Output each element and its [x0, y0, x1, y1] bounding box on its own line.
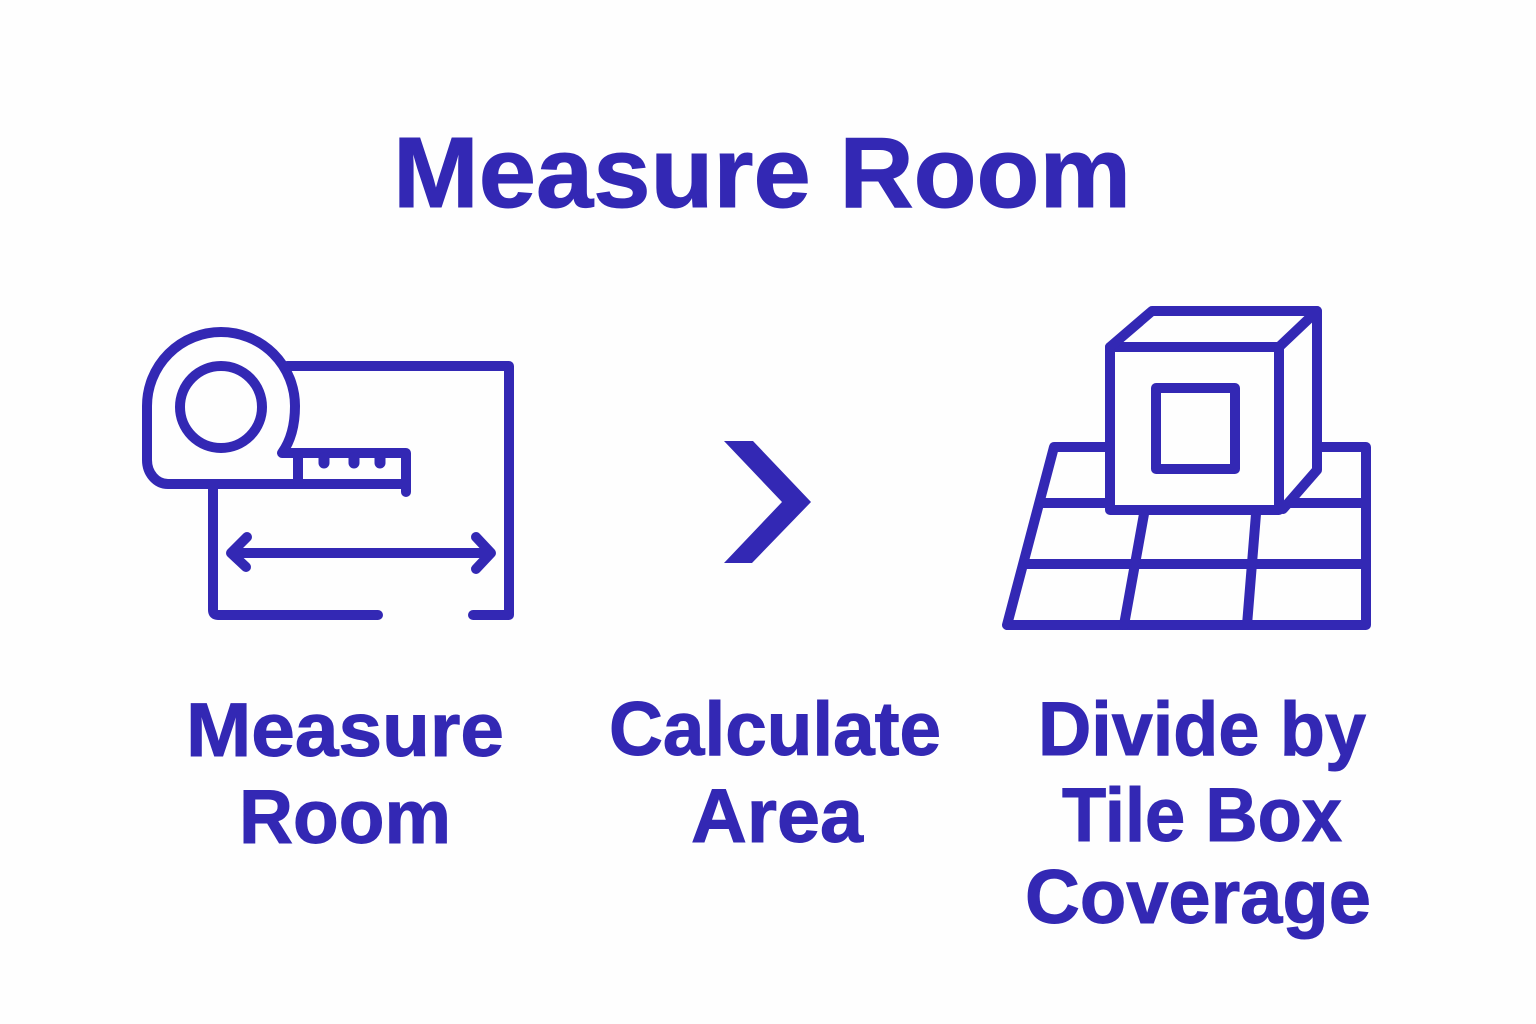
- label: Calculate Area: Calculate: [609, 687, 941, 772]
- label: Divide by Tile Box Coverage: Coverage: [1025, 855, 1371, 940]
- label: Divide by Tile Box Coverage: Divide by: [1038, 687, 1366, 772]
- icon: tile box on floor grid: [1007, 311, 1366, 625]
- label: Divide by Tile Box Coverage: Tile Box: [1062, 773, 1342, 858]
- arrow: chevron: [724, 441, 811, 563]
- label: Measure Room: Measure: [186, 688, 504, 773]
- label: Divide by Tile Box Coverage: [1025, 687, 1371, 940]
- icon: tape measure and room outline: [147, 332, 509, 615]
- label: Measure Room: [186, 688, 504, 860]
- title: Measure Room: [393, 117, 1131, 229]
- label: Calculate Area: Area: [691, 774, 864, 859]
- label: Calculate Area: [609, 687, 941, 859]
- label: Measure Room: Room: [239, 775, 451, 860]
